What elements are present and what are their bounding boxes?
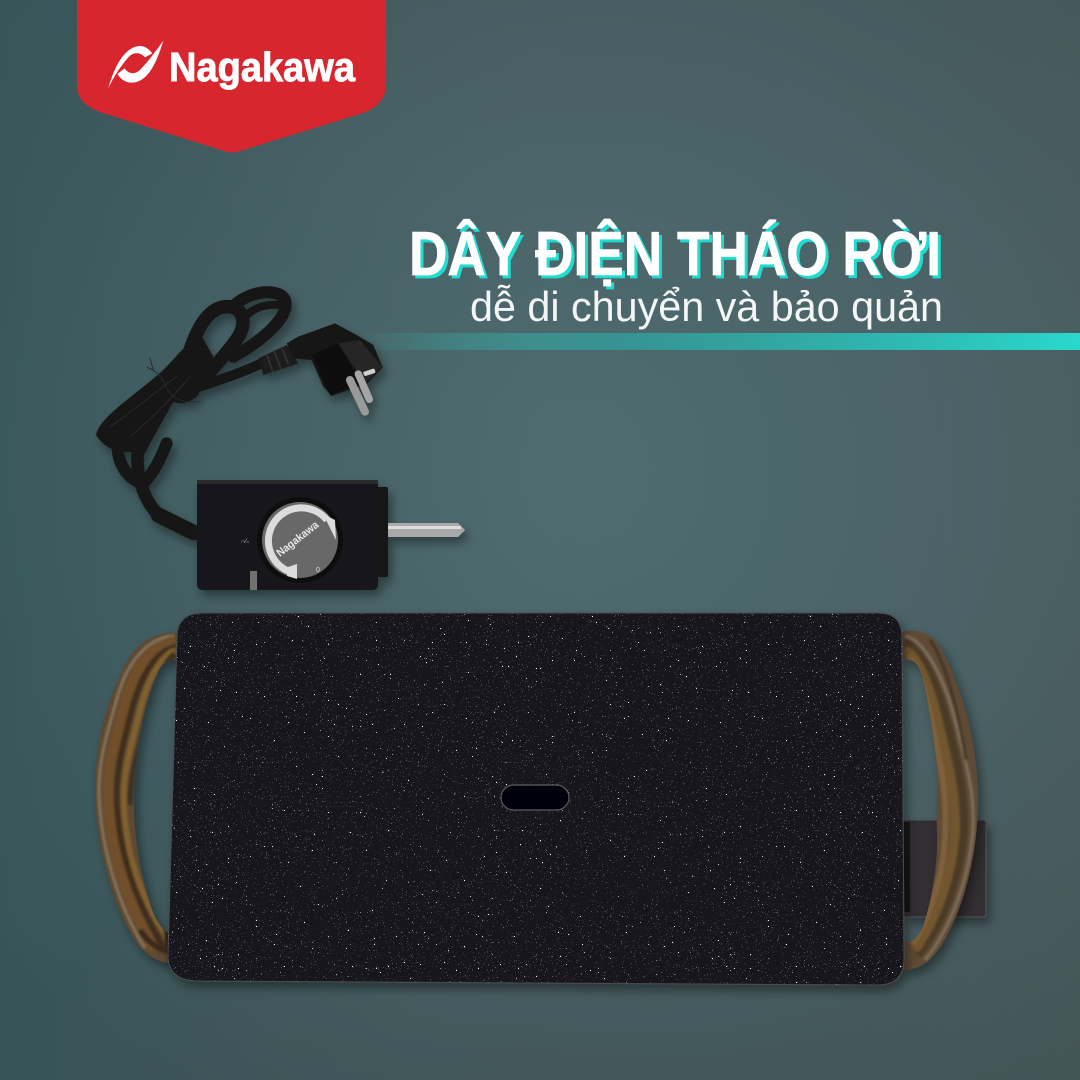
temperature dial: Nagakawa: [274, 519, 322, 559]
right control box: [903, 820, 986, 917]
controller body: ∩⁄₌: [241, 539, 249, 545]
left wooden handle: [95, 632, 178, 965]
heading: [409, 220, 944, 292]
centre oval slot: [501, 785, 569, 810]
heading main text: DÂY ĐIỆN THÁO RỜI: [409, 220, 941, 289]
teal accent bar: [360, 333, 1080, 350]
temperature dial: [257, 497, 343, 583]
granite speckles: [165, 610, 907, 988]
logo badge: [77, 0, 386, 152]
temperature dial: 0: [316, 567, 320, 574]
controller body: [197, 480, 388, 590]
logo swoosh icon: [108, 41, 163, 88]
heading shadow: DÂY ĐIỆN THÁO RỜI: [412, 223, 944, 292]
controller pin: [387, 523, 465, 537]
logo wordmark: Nagakawa: [169, 44, 356, 90]
power cord with plug and controller: [96, 292, 465, 590]
right wooden handle: [902, 631, 978, 970]
plug: [258, 323, 383, 412]
red badge shape: [77, 0, 386, 152]
coiled cord: [96, 292, 287, 533]
grill plate: [165, 610, 907, 988]
subheading: dễ di chuyển và bảo quản: [470, 283, 943, 330]
